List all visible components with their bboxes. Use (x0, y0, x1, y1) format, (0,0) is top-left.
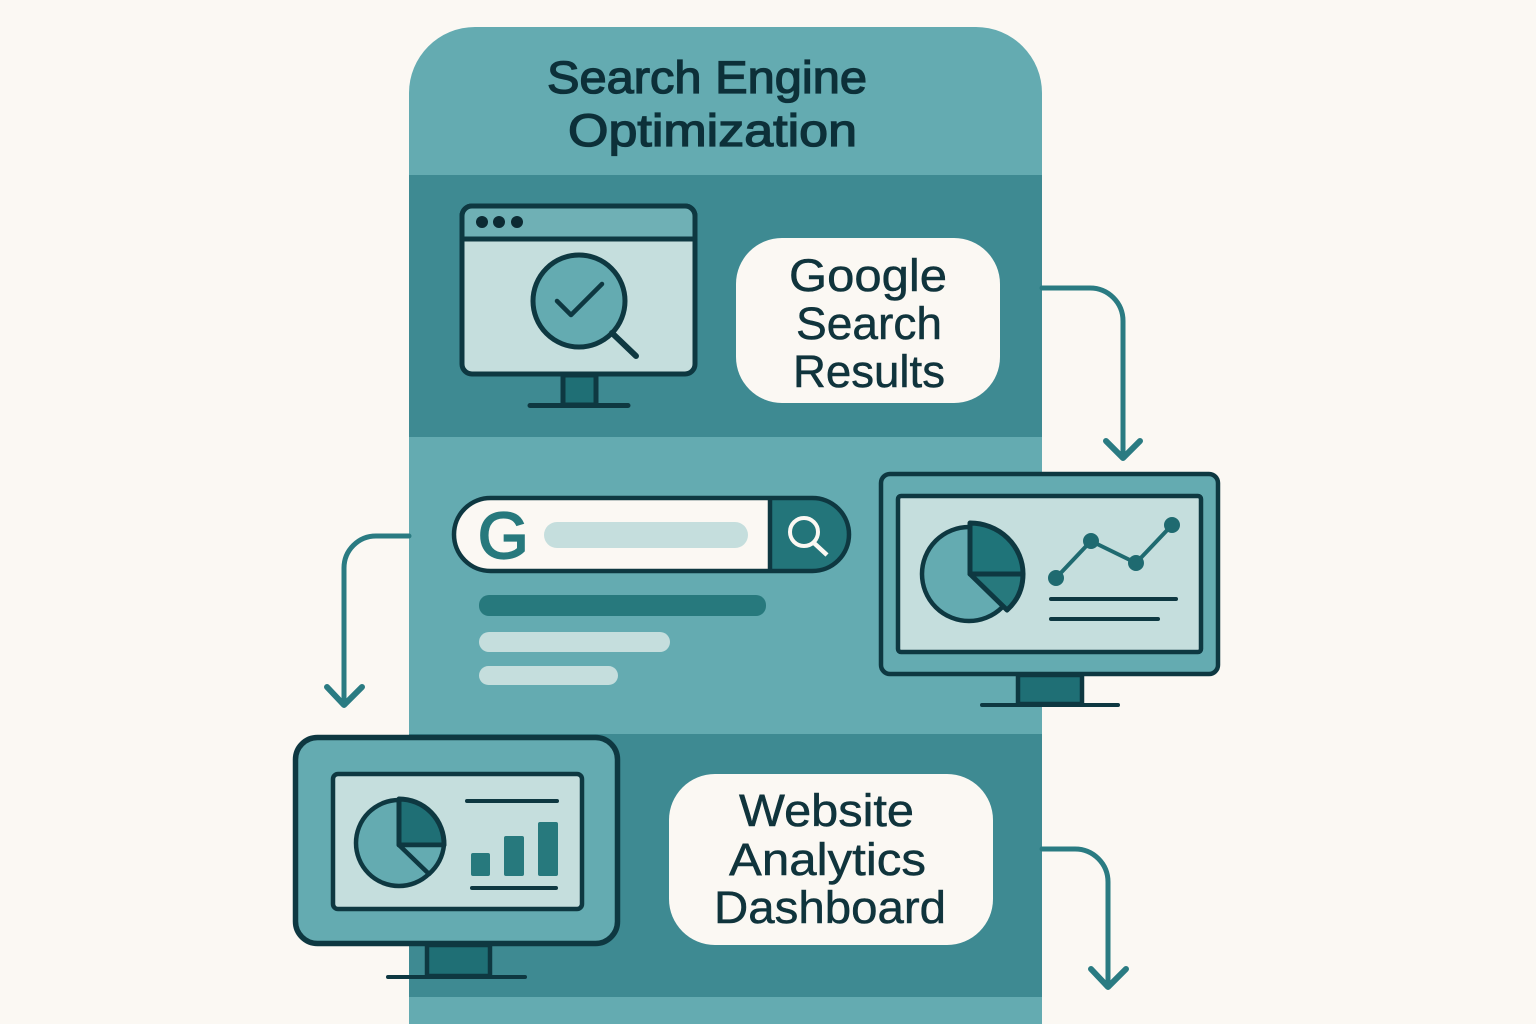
search bar (454, 497, 849, 572)
icon: browser monitor with magnifier check (462, 206, 695, 406)
icon: monitor with pie and bar chart (296, 738, 618, 977)
callout: Google Search Results: Search (796, 298, 942, 349)
title (547, 52, 867, 156)
title: Search Engine (547, 52, 867, 103)
arrow: results to monitor (1042, 288, 1140, 458)
arrow: search to dashboard (327, 536, 409, 705)
arrow: dashboard onward (1042, 849, 1126, 987)
callout: Website Analytics Dashboard: Website (739, 785, 914, 836)
callout: Google Search Results: Google (789, 250, 947, 301)
icon: monitor with pie and line chart (881, 474, 1218, 705)
callout: Website Analytics Dashboard (669, 774, 993, 945)
callout: Website Analytics Dashboard: Dashboard (714, 882, 946, 933)
callout: Google Search Results: Results (793, 346, 945, 397)
callout: Google Search Results (736, 238, 1000, 403)
panel: main column (409, 27, 1042, 1024)
search result bars (479, 595, 766, 685)
search bar: G (478, 499, 529, 572)
title: Optimization (568, 105, 857, 156)
callout: Website Analytics Dashboard: Analytics (729, 834, 926, 885)
